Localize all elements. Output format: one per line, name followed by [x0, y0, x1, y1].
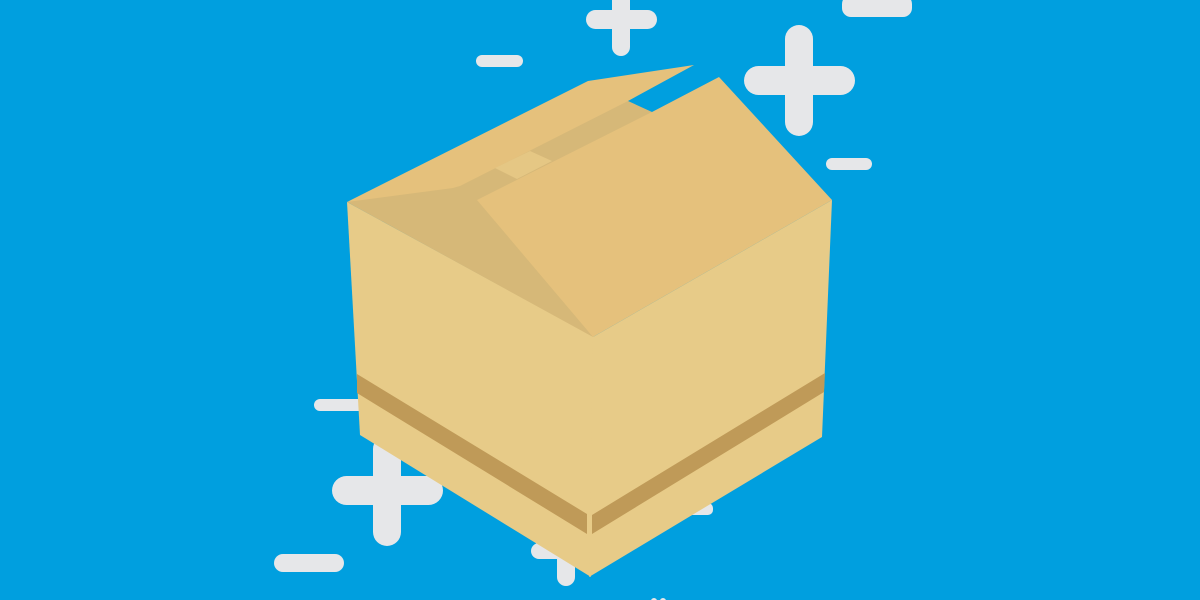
box left face — [347, 202, 594, 577]
icon: minus left — [314, 399, 374, 411]
box right face — [589, 200, 832, 577]
icon: minus behind box lower right — [667, 503, 713, 515]
icon: minus right — [826, 158, 872, 170]
light tape patch — [495, 151, 552, 179]
right packing tape — [592, 373, 825, 534]
icon: small plus bottom — [531, 515, 602, 586]
plus and minus signs — [274, 0, 912, 600]
icon: large plus top right — [744, 25, 855, 136]
flap interior shadow — [347, 100, 652, 337]
icon: minus top right — [842, 0, 912, 17]
front flap — [477, 77, 832, 337]
icon: large plus lower left — [332, 435, 443, 546]
icon: minus bottom left — [274, 554, 344, 572]
icon: small plus top — [586, 0, 657, 56]
left packing tape — [357, 374, 587, 534]
back flap — [347, 65, 694, 202]
icon: minus top left — [476, 55, 523, 67]
cardboard box — [347, 65, 832, 577]
icon: partial sign at bottom edge — [651, 598, 666, 600]
